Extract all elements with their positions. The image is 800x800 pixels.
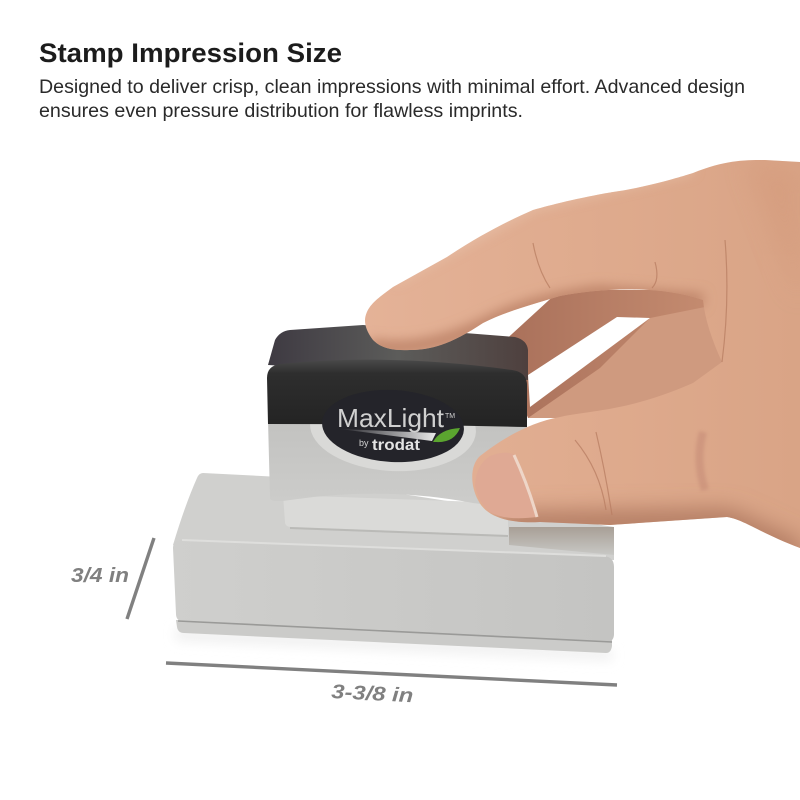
- base lip: [176, 620, 612, 653]
- base front: [173, 540, 614, 642]
- stamp handle: trodat: [372, 437, 421, 454]
- logo text: MaxLight: [337, 403, 445, 433]
- neck: [283, 495, 508, 535]
- dimension label: height: 3/4 in: [71, 565, 129, 587]
- hand shading: [370, 160, 800, 555]
- logo swoosh: [340, 429, 436, 441]
- stamp handle: [267, 325, 528, 536]
- base shadow under thumb: [509, 527, 614, 555]
- icon: leaf: [433, 428, 460, 442]
- thumbnail: [475, 453, 537, 518]
- stamp handle: by: [359, 438, 369, 448]
- dimension line: width: [166, 663, 617, 685]
- dimension label: width: 3-3/8 in: [331, 681, 414, 707]
- logo recess: [308, 381, 478, 475]
- hand: index finger, palm and thumb: [365, 160, 800, 555]
- stamp handle: TM: [445, 413, 455, 420]
- black cap: [267, 360, 527, 427]
- hand: back fingers: [500, 290, 730, 418]
- base shadow: [176, 628, 612, 660]
- logo oval: [320, 386, 466, 466]
- base top plane: [173, 473, 614, 560]
- stamp base: [173, 473, 614, 660]
- skin mark: [699, 432, 705, 490]
- light gray body: [268, 420, 527, 510]
- description text: ensures even pressure distribution for flawless imprints.: [39, 100, 523, 122]
- description text: Designed to deliver crisp, clean impressions with minimal effort. Advanced design: [39, 76, 745, 98]
- description text: [39, 76, 745, 122]
- dimension line: height: [127, 538, 154, 619]
- clear top: [268, 325, 528, 380]
- knuckle creases: [533, 240, 727, 515]
- title: Stamp Impression Size: [39, 38, 342, 68]
